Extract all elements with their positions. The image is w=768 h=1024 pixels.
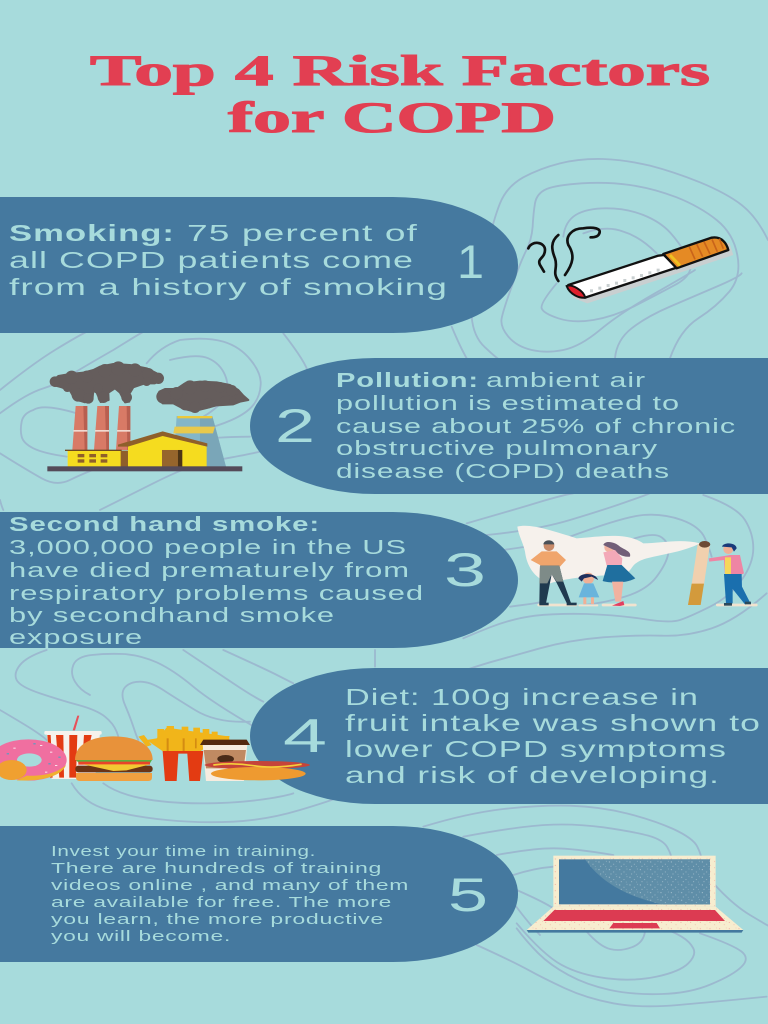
smoking text: 75 percent of bbox=[187, 220, 418, 246]
training text: you learn, the more productive bbox=[51, 911, 384, 928]
icon: fast food bbox=[0, 716, 310, 781]
second hand smoke text: exposure bbox=[9, 626, 143, 649]
training text bbox=[51, 843, 409, 945]
number 3: 3 bbox=[444, 543, 486, 596]
second hand smoke text: Second hand smoke: bbox=[9, 513, 320, 536]
pollution text: obstructive pulmonary bbox=[336, 438, 658, 460]
icon: laptop bbox=[527, 856, 743, 933]
donut bbox=[0, 739, 67, 781]
woman bbox=[603, 542, 635, 606]
diet text: Diet: 100g increase in bbox=[345, 684, 699, 710]
second hand smoke text: respiratory problems caused bbox=[9, 582, 424, 605]
second hand smoke text bbox=[9, 513, 424, 649]
diet text: and risk of developing. bbox=[345, 762, 720, 788]
smoking text bbox=[9, 220, 448, 300]
pollution text: ambient air bbox=[486, 370, 646, 392]
number 2: 2 bbox=[275, 399, 315, 452]
burger bbox=[75, 736, 153, 781]
title bbox=[90, 48, 710, 142]
pollution text: disease (COPD) deaths bbox=[336, 461, 670, 483]
pollution text: Pollution: bbox=[336, 370, 479, 392]
man bbox=[531, 540, 577, 605]
smoking text: Smoking: bbox=[9, 220, 175, 246]
smoking text: from a history of smoking bbox=[9, 274, 448, 300]
second hand smoke text: by secondhand smoke bbox=[9, 604, 335, 627]
pollution text bbox=[336, 370, 736, 483]
title: Top 4 Risk Factors bbox=[90, 48, 710, 95]
hot dog bbox=[205, 761, 310, 780]
diet text: lower COPD symptoms bbox=[345, 736, 727, 762]
training text: Invest your time in training. bbox=[51, 843, 316, 860]
training text: you will become. bbox=[51, 928, 231, 945]
fries bbox=[138, 726, 230, 781]
number 1: 1 bbox=[457, 235, 484, 288]
drink bbox=[44, 716, 102, 779]
panel: diet bbox=[250, 668, 768, 804]
icon: cigarette bbox=[528, 228, 733, 303]
pollution text: pollution is estimated to bbox=[336, 393, 680, 415]
panel: pollution bbox=[250, 358, 768, 494]
diet text bbox=[345, 684, 761, 788]
second hand smoke text: 3,000,000 people in the US bbox=[9, 536, 407, 559]
second hand smoke text: have died prematurely from bbox=[9, 559, 410, 582]
boy bbox=[709, 543, 751, 606]
panel: training bbox=[0, 826, 518, 962]
number 4: 4 bbox=[283, 709, 327, 762]
panel: second hand smoke bbox=[0, 512, 518, 649]
panel: smoking bbox=[0, 197, 518, 333]
girl bbox=[578, 573, 599, 604]
number 5: 5 bbox=[448, 868, 488, 921]
smoking text: all COPD patients come bbox=[9, 247, 414, 273]
pollution text: cause about 25% of chronic bbox=[336, 416, 736, 438]
training text: There are hundreds of training bbox=[51, 860, 382, 877]
title: for COPD bbox=[228, 95, 556, 142]
training text: are available for free. The more bbox=[51, 894, 392, 911]
icon: family and giant cigarette bbox=[517, 526, 758, 606]
coffee bbox=[200, 740, 250, 781]
diet text: fruit intake was shown to bbox=[345, 710, 761, 736]
icon: factory bbox=[47, 361, 248, 471]
giant cigarette bbox=[688, 541, 710, 605]
training text: videos online , and many of them bbox=[51, 877, 409, 894]
